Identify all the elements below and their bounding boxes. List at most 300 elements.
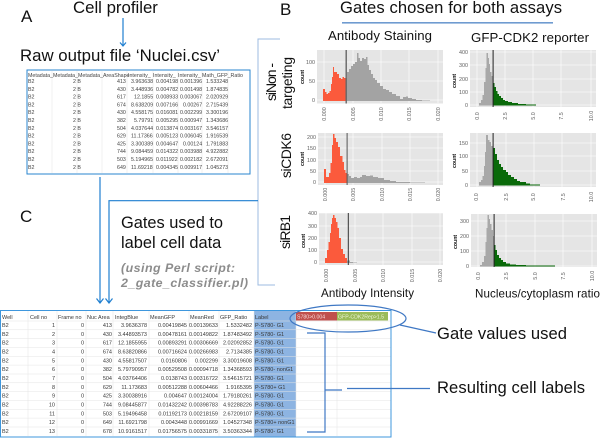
table: raw output: B2 <box>28 87 35 93</box>
table: raw output: 2.672091 <box>206 157 228 163</box>
axis label: antibody intensity: Antibody Intensity <box>321 287 414 300</box>
table: raw output: 0.003167 <box>180 126 202 132</box>
table: labelled cell data: 1 <box>52 323 55 329</box>
table: raw output: 2 B <box>73 149 81 155</box>
bracket around plots <box>258 39 280 285</box>
table: raw output: 674 <box>117 102 126 108</box>
table: raw output: 2 B <box>73 87 81 93</box>
histogram: siNon antibody: 0.020 <box>436 107 442 121</box>
table: labelled cell data: Well <box>2 315 13 321</box>
table: labelled cell data: MeanGFP <box>150 315 175 321</box>
table: labelled cell data: 10.9161517 <box>118 429 147 435</box>
table: labelled cell data: P-S780- G1 <box>255 358 284 364</box>
table: labelled cell data: 5 <box>52 358 55 364</box>
table: labelled cell data: Nuc Area <box>87 315 111 321</box>
table: labelled cell data: 2 <box>52 332 55 338</box>
table: raw output: B2 <box>28 102 35 108</box>
histogram: siNon reporter: 7.5 <box>559 112 565 120</box>
heading: panel B letter: B <box>280 0 291 19</box>
table: raw output: 11.17366 <box>131 134 153 140</box>
histogram: siRB1 reporter: 10.0 <box>590 271 596 281</box>
histogram: siCDK6 antibody <box>300 133 443 201</box>
table: labelled cell data: 1.9165395 <box>226 385 252 391</box>
table: labelled cell data: 7 <box>52 376 55 382</box>
table: labelled cell data: GFP_Ratio <box>220 315 247 321</box>
table: labelled cell data: GFP-CDK2Rep>1.5 <box>338 314 384 320</box>
table: raw output: Intensity_ <box>128 73 151 79</box>
heading: antibody staining: Antibody Staining <box>328 28 432 43</box>
label: gate values used: Gate values used <box>437 324 567 343</box>
row label: siNon: targeting <box>279 57 295 109</box>
table: labelled cell data: 1.79180261 <box>223 394 252 400</box>
table: raw output: 4.922882 <box>206 149 228 155</box>
arrow: raw output to table <box>96 177 104 303</box>
table: raw output: B2 <box>28 110 35 116</box>
table: labelled cell data: 0.01192173 <box>158 411 187 417</box>
histogram: siRB1 antibody: count <box>301 234 307 248</box>
table: labelled cell data: 5.79790957 <box>118 367 147 373</box>
table: raw output: 0.002182 <box>180 157 202 163</box>
histogram: siRB1 reporter: 0 <box>466 264 469 270</box>
table: raw output: 2 B <box>73 157 81 163</box>
histogram: siRB1 antibody: 0.000 <box>324 269 330 282</box>
histogram: siCDK6 antibody: 0.020 <box>436 188 442 201</box>
table: labelled cell data: 504 <box>103 376 112 382</box>
histogram: siRB1 antibody: 0.010 <box>381 269 387 282</box>
table: labelled cell data: 629 <box>103 385 112 391</box>
table: raw output: 0.00124 <box>183 141 202 147</box>
table: labelled cell data: Label <box>255 315 268 321</box>
histogram: siNon reporter: 300 <box>459 63 468 69</box>
table: raw output: 4.037644 <box>131 126 153 132</box>
table: labelled cell data: B2 <box>2 429 9 435</box>
table: raw output: B2 <box>28 157 35 163</box>
histogram: siNon antibody: 0.015 <box>407 107 413 121</box>
table: labelled cell data: 0.00094718 <box>189 367 218 373</box>
table: labelled cell data: P-S780- G1 <box>255 323 284 329</box>
histogram: siNon reporter: 400 <box>459 50 468 56</box>
table: raw output: Metadata_ <box>78 73 103 79</box>
histogram: siCDK6 reporter: 150 <box>459 141 468 147</box>
histogram: siCDK6 reporter: 5.0 <box>531 193 537 201</box>
histogram: siNon reporter: 2.5 <box>503 112 509 120</box>
table: labelled cell data: 0.00139633 <box>189 323 218 329</box>
table: labelled cell data: 3 <box>52 341 55 347</box>
table: labelled cell data <box>0 310 391 437</box>
histogram: siNon antibody: 0.005 <box>351 107 357 121</box>
table: raw output: 744 <box>117 149 126 155</box>
text: perl script note <box>120 261 248 290</box>
histogram: siCDK6 antibody: 0.010 <box>380 188 386 201</box>
table: labelled cell data: 2.02092852 <box>223 341 252 347</box>
table: raw output: 2 B <box>73 134 81 140</box>
histogram: siNon antibody: 0.000 <box>322 107 328 121</box>
table: labelled cell data: 0.01432242 <box>158 402 187 408</box>
histogram: siRB1 reporter: 7.5 <box>561 272 567 280</box>
table: raw output: 0.005123 <box>156 134 178 140</box>
table: labelled cell data: 0 <box>81 420 84 426</box>
row label: siNon: siNon - <box>263 63 279 101</box>
text: perl script note: (using Perl script: <box>121 261 235 275</box>
table: labelled cell data: 2.7134385 <box>226 350 252 356</box>
table: labelled cell data: 0 <box>81 429 84 435</box>
table: labelled cell data: 2.67209107 <box>223 411 252 417</box>
table: labelled cell data: B2 <box>2 385 9 391</box>
histogram: siRB1 antibody: 0.015 <box>410 269 416 282</box>
table: raw output: 0.001396 <box>180 79 202 85</box>
histogram: siRB1 reporter: 300 <box>460 219 469 225</box>
table: labelled cell data: 10 <box>49 402 55 408</box>
table: labelled cell data: 3.30038916 <box>118 394 147 400</box>
histogram: siNon reporter: 0.0 <box>475 112 481 120</box>
table: raw output: 425 <box>117 141 126 147</box>
table: labelled cell data: B2 <box>2 394 9 400</box>
histogram: siRB1 antibody: 300 <box>308 224 317 230</box>
table: raw output: 0.006045 <box>180 134 202 140</box>
table: labelled cell data: 0 <box>81 376 84 382</box>
histogram: siCDK6 reporter: 10.0 <box>589 192 595 202</box>
table: raw output: 5.194965 <box>131 157 153 163</box>
table: labelled cell data: 3.9636378 <box>121 323 147 329</box>
histogram: siCDK6 antibody: 0.015 <box>408 188 414 201</box>
table: raw output: 2 B <box>73 95 81 101</box>
histogram: siCDK6 antibody: 200 <box>307 135 316 141</box>
table: labelled cell data: 0 <box>81 411 84 417</box>
table: labelled cell data: B2 <box>2 341 9 347</box>
table: labelled cell data: 3.50363344 <box>223 429 252 435</box>
table: raw output: 0.005295 <box>156 118 178 124</box>
histogram: siRB1 reporter: 2.5 <box>504 272 510 280</box>
table: labelled cell data: 8 <box>52 385 55 391</box>
table: raw output: 0.013874 <box>156 126 178 132</box>
table: raw output: 1.343686 <box>206 118 228 124</box>
table: labelled cell data: Frame no <box>58 315 82 321</box>
table: raw output: 2 B <box>73 118 81 124</box>
text: gates used <box>121 214 223 252</box>
table: labelled cell data: 744 <box>103 402 112 408</box>
table: labelled cell data: 430 <box>103 358 112 364</box>
table: raw output: 0.002299 <box>180 110 202 116</box>
table: labelled cell data: 425 <box>103 394 112 400</box>
table: labelled cell data: B2 <box>2 420 9 426</box>
table: labelled cell data: 0.00604466 <box>189 385 218 391</box>
table: labelled cell data: B2 <box>2 332 9 338</box>
table: labelled cell data: B2 <box>2 358 9 364</box>
table: raw output: Intensity_ <box>153 73 176 79</box>
table: raw output: 503 <box>117 157 126 163</box>
table: labelled cell data: 5.19496458 <box>118 411 147 417</box>
row label: siNon <box>263 57 295 109</box>
table: labelled cell data: 0 <box>81 385 84 391</box>
table: labelled cell data: 617 <box>103 341 112 347</box>
table: labelled cell data: 0.0160806 <box>161 358 187 364</box>
table: labelled cell data: 0 <box>81 350 84 356</box>
table: labelled cell data: 6 <box>52 367 55 373</box>
table: labelled cell data: P-S780- G1 <box>255 341 284 347</box>
table: raw output: 0.009917 <box>180 165 202 171</box>
histogram: siCDK6 antibody: count <box>300 152 306 166</box>
histogram: siRB1 reporter: 0.0 <box>476 272 482 280</box>
table: raw output: 0.003067 <box>180 95 202 101</box>
histogram: siNon antibody: 0 <box>312 98 315 104</box>
table: labelled cell data: 4.92288226 <box>223 402 252 408</box>
histogram: siCDK6 reporter: 100 <box>459 154 468 160</box>
table: labelled cell data: 0.00419845 <box>158 323 187 329</box>
table: labelled cell data: 11.6921798 <box>118 420 147 426</box>
histogram: siNon antibody <box>300 50 443 121</box>
table: labelled cell data: 0.00306669 <box>189 341 218 347</box>
table: labelled cell data: 0.00398783 <box>189 402 218 408</box>
table: labelled cell data: 0 <box>81 367 84 373</box>
table: raw output: 0.004198 <box>156 79 178 85</box>
table: labelled cell data: IntegBlue <box>115 315 138 321</box>
table: labelled cell data: S780>0.004 <box>297 314 325 320</box>
table: raw output: 649 <box>117 165 126 171</box>
table: labelled cell data: 0 <box>81 341 84 347</box>
table: labelled cell data: P-S780+ nonG1 <box>255 420 295 426</box>
table: raw output: 0.00267 <box>183 102 202 108</box>
table: labelled cell data: P-S780- G1 <box>255 332 284 338</box>
table: raw output: 430 <box>117 110 126 116</box>
table: labelled cell data: 0 <box>81 358 84 364</box>
table: raw output: 12.1855 <box>134 95 153 101</box>
table: labelled cell data: P-S780- G1 <box>255 376 284 382</box>
table: raw output: AreaShape <box>103 73 130 79</box>
table: raw output: 0.016081 <box>156 110 178 116</box>
table: labelled cell data: 674 <box>103 350 112 356</box>
table: labelled cell data: 0.00991669 <box>189 420 218 426</box>
table: labelled cell data: B2 <box>2 367 9 373</box>
table: labelled cell data: 0.00529508 <box>158 367 187 373</box>
table: labelled cell data: P-S780- G1 <box>255 394 284 400</box>
table: labelled cell data: 3.44893573 <box>118 332 147 338</box>
table: raw output: 9.084459 <box>131 149 153 155</box>
histogram: siNon reporter: 10.0 <box>589 111 595 121</box>
histogram: siRB1 reporter: 100 <box>460 249 469 255</box>
table: raw output: 629 <box>117 134 126 140</box>
table: raw output: 2.020929 <box>206 95 228 101</box>
table: labelled cell data: 13 <box>49 429 55 435</box>
table: labelled cell data: B2 <box>2 350 9 356</box>
table: raw output: B2 <box>28 126 35 132</box>
table: labelled cell data: 678 <box>103 429 112 435</box>
table: raw output: 0.004782 <box>156 87 178 93</box>
heading: raw output file: Raw output file ‘Nuclei.csv’ <box>20 46 220 65</box>
heading: reporter: GFP-CDK2 reporter <box>471 30 590 45</box>
table: labelled cell data: 1.87483492 <box>223 332 252 338</box>
histogram: siNon antibody: 0.010 <box>379 107 385 121</box>
table: raw output: 2 B <box>73 102 81 108</box>
table: raw output: B2 <box>28 95 35 101</box>
table: raw output: 0.011922 <box>156 157 178 163</box>
histogram: siNon reporter: 0 <box>465 103 468 109</box>
underline <box>342 22 553 24</box>
table: raw output: 11.69218 <box>131 165 153 171</box>
text: gates used: Gates used to <box>121 214 223 232</box>
table: labelled cell data: 0.002299 <box>195 358 218 364</box>
histogram: siRB1 antibody: 200 <box>308 236 317 242</box>
table: labelled cell data: P-S780- G1 <box>255 411 284 417</box>
table: raw output: 1.533248 <box>206 79 228 85</box>
table: labelled cell data: 0 <box>81 402 84 408</box>
histogram: siRB1 reporter <box>453 214 597 281</box>
table: raw output: 0.007166 <box>156 102 178 108</box>
table: labelled cell data: 4.03764406 <box>118 376 147 382</box>
label: resulting cell labels: Resulting cell labels <box>437 378 585 397</box>
table: labelled cell data: 0.00512288 <box>158 385 187 391</box>
arrow: cell profiler to raw output <box>120 18 126 46</box>
table: raw output: 0.004647 <box>156 141 178 147</box>
table: labelled cell data: P-S780- G1 <box>255 350 284 356</box>
table: raw output: 617 <box>117 95 126 101</box>
table: labelled cell data: 0.00478161 <box>158 332 187 338</box>
table: labelled cell data: 503 <box>103 411 112 417</box>
table: labelled cell data: 12.1855955 <box>118 341 147 347</box>
arrow: gates to table <box>106 201 258 303</box>
table: raw output: 3.300389 <box>131 141 153 147</box>
table: raw output: 5.79791 <box>134 118 153 124</box>
callout line: gate values <box>400 325 436 333</box>
histogram: siNon reporter: 5.0 <box>531 112 537 120</box>
table: labelled cell data: 12 <box>49 420 55 426</box>
histogram: siCDK6 reporter: 2.5 <box>504 193 510 201</box>
table: raw output: 4.558175 <box>131 110 153 116</box>
table: labelled cell data: P-S780+ G1 <box>255 385 285 391</box>
table: labelled cell data: 430 <box>103 332 112 338</box>
label column <box>254 311 296 436</box>
table: raw output: 0.004345 <box>156 165 178 171</box>
text: gates used: label cell data <box>121 234 222 252</box>
table: raw output: 382 <box>117 118 126 124</box>
table: labelled cell data: 382 <box>103 367 112 373</box>
table: labelled cell data: 0.0138743 <box>161 376 187 382</box>
table: labelled cell data: 413 <box>103 323 112 329</box>
heading: panel A letter: A <box>21 7 33 26</box>
table: labelled cell data: B2 <box>2 376 9 382</box>
bracket: resulting labels <box>307 333 342 432</box>
table: raw output: Metadata_ <box>28 73 53 79</box>
histogram: siNon reporter <box>452 50 596 121</box>
histogram: siRB1 antibody <box>301 211 444 282</box>
table: labelled cell data: 11 <box>49 411 55 417</box>
table: raw output: 2.715439 <box>206 102 228 108</box>
histogram: siRB1 antibody: 0 <box>314 260 317 266</box>
table: labelled cell data: P-S780- nonG1 <box>255 367 293 373</box>
histogram: siCDK6 antibody: 0 <box>313 180 316 186</box>
callout: ellipse around gate values <box>290 305 406 332</box>
histogram: siRB1 antibody: 100 <box>308 248 317 254</box>
table: raw output: 2 B <box>73 165 81 171</box>
histogram: siCDK6 reporter: count <box>452 154 458 168</box>
callout line: resulting labels <box>347 388 430 390</box>
table: labelled cell data: MeanRed <box>190 315 214 321</box>
table: labelled cell data: 0.00316722 <box>189 376 218 382</box>
table: raw output: 504 <box>117 126 126 132</box>
histogram: siCDK6 reporter: 7.5 <box>561 193 567 201</box>
table: raw output: 0.000947 <box>180 118 202 124</box>
table: raw output: 1.791883 <box>206 141 228 147</box>
table: labelled cell data: 0.00893291 <box>158 341 187 347</box>
table: labelled cell data: 0 <box>81 394 84 400</box>
table: labelled cell data: B2 <box>2 411 9 417</box>
table: labelled cell data: 0 <box>81 332 84 338</box>
table: raw output: 8.638209 <box>131 102 153 108</box>
table: raw output: 2 B <box>73 141 81 147</box>
table: labelled cell data: 0.004647 <box>164 394 187 400</box>
table: raw output: Metadata_ <box>53 73 78 79</box>
table: labelled cell data: 11.173683 <box>121 385 147 391</box>
histogram: siCDK6 antibody: 0.005 <box>351 188 357 201</box>
histogram: siNon reporter: count <box>452 74 458 88</box>
table: raw output: 2 B <box>73 79 81 85</box>
histogram: siRB1 antibody: 0.020 <box>438 269 444 282</box>
table: raw output: 2 B <box>73 110 81 116</box>
table: labelled cell data: 1.04527348 <box>223 420 252 426</box>
table: labelled cell data: Cell no <box>30 315 47 321</box>
histogram: siNon antibody: count <box>300 70 306 84</box>
axis label: nucleus/cytoplasm ratio: Nucleus/cytoplasm ratio <box>475 288 600 300</box>
table: raw output: 430 <box>117 87 126 93</box>
table: raw output: Intensity_ <box>178 73 201 79</box>
table: raw output: B2 <box>28 118 35 124</box>
table: labelled cell data: 0.00331875 <box>189 429 218 435</box>
table: labelled cell data: 0.00716624 <box>158 350 187 356</box>
table: raw output: 0.001498 <box>180 87 202 93</box>
table: labelled cell data: 0.0043448 <box>161 420 187 426</box>
histogram: siNon reporter: 200 <box>459 77 468 83</box>
table: labelled cell data: 0.00266983 <box>189 350 218 356</box>
table: raw output: B2 <box>28 79 35 85</box>
table: raw output: B2 <box>28 165 35 171</box>
row label: siRB1: siRB1 <box>277 215 293 249</box>
histogram: siNon antibody: 100 <box>306 60 315 66</box>
histogram: siCDK6 reporter: 50 <box>462 169 468 175</box>
table: raw output: 413 <box>117 79 126 85</box>
table: labelled cell data: B2 <box>2 323 9 329</box>
histogram: siRB1 antibody: 400 <box>308 211 317 217</box>
table: raw output: B2 <box>28 141 35 147</box>
histogram: siRB1 reporter: 5.0 <box>533 272 539 280</box>
table: labelled cell data: 0.00149822 <box>189 332 218 338</box>
gate cell: S780 <box>296 312 337 320</box>
text: perl script note: 2_gate_classifier.pl) <box>120 276 248 290</box>
table: labelled cell data: 9.08445877 <box>118 402 147 408</box>
heading: panel C letter: C <box>20 207 32 226</box>
table: raw output: 3.300196 <box>206 110 228 116</box>
histogram: siCDK6 antibody: 0.000 <box>323 188 329 201</box>
histogram: siRB1 reporter: count <box>453 235 459 249</box>
gate cell: GFP-CDK2 <box>337 312 388 320</box>
table: raw output: 0.014322 <box>156 149 178 155</box>
table: labelled cell data: 9 <box>52 394 55 400</box>
histogram: siCDK6 reporter <box>452 133 596 202</box>
table: raw output: 1.874835 <box>206 87 228 93</box>
table: labelled cell data: P-S780- G1 <box>255 402 284 408</box>
table: raw output: B2 <box>28 134 35 140</box>
histogram: siRB1 reporter: 200 <box>460 234 469 240</box>
table: labelled cell data: 3.54615721 <box>223 376 252 382</box>
table: raw output: 3.963638 <box>131 79 153 85</box>
table: labelled cell data: 0.00124004 <box>189 394 218 400</box>
table: labelled cell data: 1.5332482 <box>226 323 252 329</box>
histogram: siCDK6 reporter: 0.0 <box>474 193 480 201</box>
table: labelled cell data: P-S780- G1 <box>255 429 284 435</box>
table: labelled cell data: 649 <box>103 420 112 426</box>
row label: siCDK6: siCDK6 <box>278 133 294 178</box>
table: labelled cell data: 0.00218159 <box>189 411 218 417</box>
table: labelled cell data: 0.01756575 <box>158 429 187 435</box>
histogram: siCDK6 antibody: 50 <box>310 169 316 175</box>
